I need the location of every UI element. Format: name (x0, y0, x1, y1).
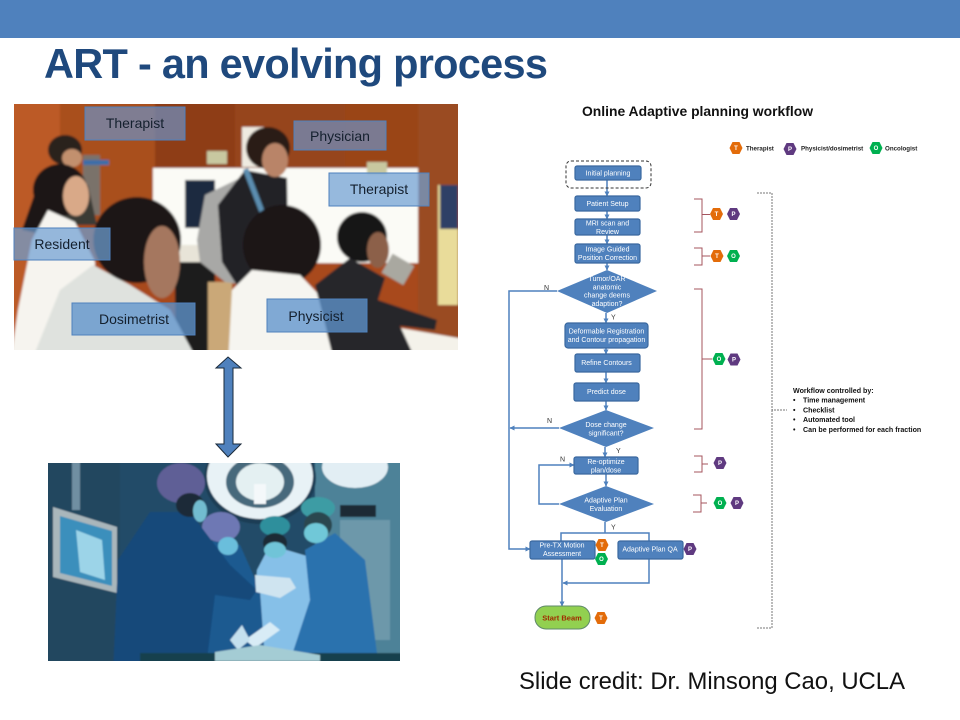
arrow: double-headed link between photos (216, 357, 241, 457)
workflow control notes: Workflow controlled by: (793, 387, 874, 395)
dashed group: initial planning (566, 161, 651, 188)
role legend: P (788, 147, 792, 153)
role badges: pre-TX T and O: T (600, 543, 604, 549)
workflow control notes: Can be performed for each fraction (803, 426, 921, 434)
role group: O P for adaptation decision (694, 289, 740, 429)
resident (33, 164, 87, 216)
role group: O P for adaptation decision: P (732, 358, 736, 364)
step: re-optimize (574, 457, 638, 474)
role group: T P for setup and MRI (694, 199, 740, 232)
step: MRI scan and review: Review (596, 229, 620, 236)
workflow control notes: Time management (803, 396, 866, 404)
step: image guided position correction (575, 244, 640, 263)
step: pre-TX motion assessment (530, 541, 595, 559)
step: predict dose (574, 383, 639, 401)
role badges: pre-TX T and O: O (599, 557, 604, 563)
label: Resident: Resident (34, 236, 90, 252)
label: Therapist (top left): Therapist (106, 115, 164, 131)
step: pre-TX motion assessment: Pre-TX Motion (539, 542, 585, 550)
label: Dosimetrist: Dosimetrist (99, 311, 169, 327)
workflow control notes: • (793, 396, 796, 404)
workflow control notes: Automated tool (803, 416, 855, 424)
seated therapist (337, 212, 387, 262)
workflow control notes (793, 387, 921, 434)
standing physician (196, 178, 239, 285)
decision: dose change: Dose change (585, 422, 627, 429)
step: refine contours (575, 354, 640, 372)
decision: anatomic change: change deems (584, 292, 630, 300)
role group: P for re-optimize: P (718, 461, 722, 467)
step: initial planning (575, 166, 641, 180)
label: Resident (14, 228, 110, 260)
role legend: Physicist/dosimetrist (801, 146, 863, 152)
step: patient setup (575, 196, 640, 211)
role legend: T (734, 146, 738, 152)
decision: plan evaluation: Adaptive Plan (584, 498, 628, 504)
label: Y: Y (616, 448, 621, 455)
label: Physician: Physician (310, 128, 370, 144)
step: re-optimize: Re-optimize (587, 459, 625, 466)
flowchart heading: Online Adaptive planning workflow (582, 104, 813, 119)
step: deformable registration (565, 323, 648, 348)
step: image guided position correction: Position Correction (578, 255, 637, 262)
role group: T P for setup and MRI: P (731, 212, 736, 218)
role group: O P for plan evaluation: O (718, 501, 723, 507)
role group: O P for adaptation decision: O (717, 357, 722, 363)
step: adaptive plan QA (618, 541, 683, 559)
role group: O P for plan evaluation: P (735, 501, 739, 507)
step: deformable registration: Deformable Registration (569, 328, 644, 336)
decision: anatomic change: Tumor/OAR (588, 276, 626, 283)
role group: T O for position correction: O (731, 254, 736, 260)
step: pre-TX motion assessment: Assessment (543, 551, 581, 558)
role legend: Oncologist (885, 146, 917, 152)
workflow control notes: Checklist (803, 406, 835, 414)
back therapist (48, 135, 82, 165)
decision: anatomic change (557, 270, 657, 313)
role legend (730, 142, 917, 155)
label: Physician (294, 121, 386, 150)
role group: T O for position correction: T (715, 254, 719, 260)
monitor (53, 507, 117, 593)
label: N: N (560, 456, 565, 464)
role badges: pre-TX T and O (595, 539, 608, 565)
slide credit: Slide credit: Dr. Minsong Cao, UCLA (519, 668, 905, 695)
label: Physicist (267, 299, 367, 332)
role group: P for re-optimize (694, 456, 726, 472)
right surgeon (290, 533, 377, 661)
title: ART - an evolving process (44, 40, 548, 87)
role badge: start beam T (594, 612, 608, 624)
step: image guided position correction: Image Guided (586, 246, 630, 254)
workflow control notes: • (793, 426, 796, 434)
step: MRI scan and review (575, 219, 640, 236)
role badge: QA P (684, 543, 696, 555)
patient drape (140, 652, 400, 661)
overall dashed bracket (757, 193, 787, 628)
step: adaptive plan QA: Adaptive Plan QA (622, 546, 678, 554)
connector lines (509, 180, 649, 606)
second gowned surgeon (208, 541, 264, 654)
step: deformable registration: and Contour propagation (568, 337, 645, 344)
step: initial planning: Initial planning (586, 170, 630, 178)
role legend: Therapist (746, 146, 774, 152)
label: Physicist: Physicist (288, 308, 344, 324)
label: N: N (547, 418, 552, 425)
decision: anatomic change: anatomic (593, 284, 622, 292)
role group: O P for plan evaluation (693, 495, 744, 512)
terminal: start beam (535, 606, 590, 629)
workflow control notes: • (793, 406, 796, 414)
role group: T O for position correction (694, 248, 740, 265)
top banner (0, 0, 960, 38)
photo: surgical team in operating room (48, 463, 400, 661)
photo: clinical team at console (14, 104, 458, 350)
step: refine contours: Refine Contours (581, 360, 632, 367)
decision: dose change (559, 410, 654, 447)
terminal: start beam: Start Beam (542, 614, 582, 622)
left surgeon (113, 512, 257, 675)
role badge: start beam T: T (599, 616, 603, 622)
step: MRI scan and review: MRI scan and (586, 220, 629, 228)
role group: T P for setup and MRI: T (715, 212, 719, 218)
role badge: QA P: P (688, 547, 692, 553)
seated physicist (243, 205, 321, 285)
decision: plan evaluation (559, 486, 654, 522)
role legend: O (874, 146, 879, 152)
step: patient setup: Patient Setup (586, 201, 629, 208)
label: Y: Y (611, 524, 616, 532)
workflow control notes: • (793, 416, 796, 424)
label: Dosimetrist (72, 303, 195, 335)
step: re-optimize: plan/dose (591, 468, 621, 474)
decision: dose change: significant? (588, 430, 624, 438)
dosimetrist (36, 264, 194, 350)
label: Y: Y (611, 314, 616, 322)
decision: plan evaluation: Evaluation (590, 506, 622, 513)
label: N: N (544, 285, 549, 292)
label: Therapist (right): Therapist (350, 181, 408, 197)
flowchart (509, 161, 683, 629)
decision: anatomic change: adaption? (592, 301, 622, 308)
step: predict dose: Predict dose (587, 389, 626, 396)
central surgeon (256, 549, 311, 652)
label: Therapist (right) (329, 173, 429, 206)
label: Therapist (top left) (85, 107, 185, 140)
